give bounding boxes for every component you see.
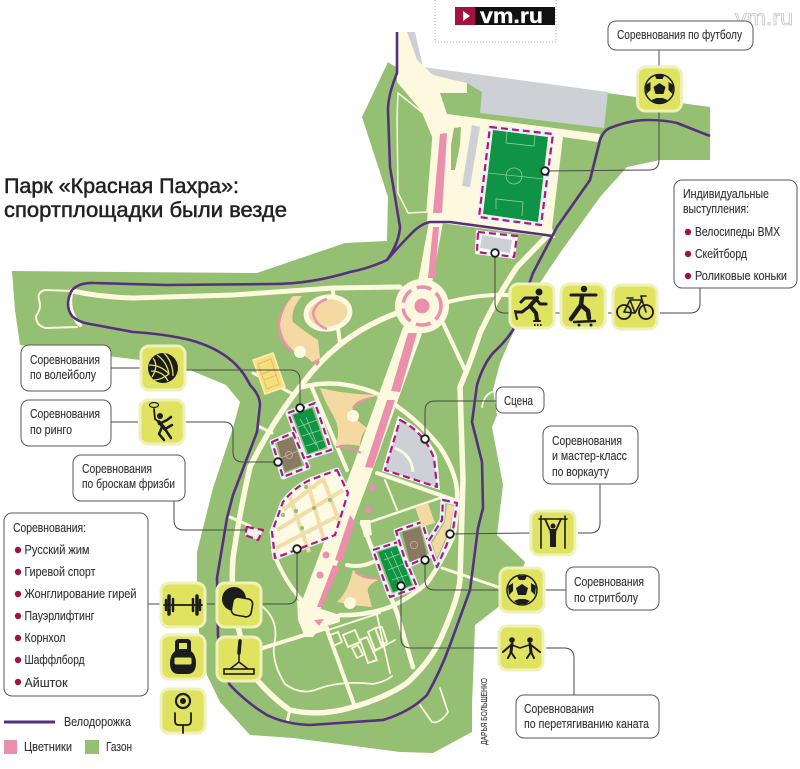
icon: kettlebell	[161, 635, 205, 679]
brown court	[272, 433, 308, 477]
callout lines	[111, 50, 700, 695]
peach bed centre	[320, 388, 383, 446]
football field	[479, 127, 553, 225]
title: Парк «Красная Пахра»:	[4, 175, 239, 198]
icon: cornhole	[217, 583, 261, 627]
icon: bicycle	[613, 285, 657, 329]
icon: roller skater	[510, 284, 554, 328]
callout: frisbee	[73, 455, 185, 501]
grey strip in plaza	[462, 125, 480, 187]
watermark: vm.ru	[735, 7, 793, 30]
panel: competitions list	[4, 513, 148, 696]
callout: tug of war: Соревнования	[524, 701, 594, 716]
title	[4, 175, 287, 222]
location markers	[274, 167, 549, 590]
icon: football	[638, 67, 682, 111]
south brown court	[396, 522, 432, 566]
callout: ringo	[21, 400, 111, 446]
callout: stage	[496, 387, 544, 413]
callout: individual performances: выступления:	[683, 201, 749, 216]
callout: individual performances: Велосипеды ВМХ	[695, 224, 780, 239]
road junction	[360, 520, 372, 537]
peach bed north	[280, 296, 320, 362]
callout: football: Соревнования по футболу	[617, 27, 742, 42]
callout: streetball: по стритболу	[574, 590, 638, 605]
yellow court	[253, 353, 285, 394]
skate ground	[475, 230, 518, 259]
callout: volleyball: Соревнования	[30, 352, 100, 367]
north plaza	[397, 32, 600, 238]
callout: football	[608, 21, 753, 50]
legend: Цветники	[24, 739, 72, 754]
callout: tug of war: по перетягиванию каната	[524, 716, 650, 731]
callout: volleyball	[21, 345, 111, 391]
callout: workout: и мастер-класс	[552, 448, 627, 463]
callout: frisbee: Соревнования	[82, 461, 152, 476]
peach lot	[415, 503, 435, 527]
callout: ringo: по ринго	[30, 422, 72, 437]
callout: volleyball: по волейболу	[30, 367, 96, 382]
icon: streetball	[500, 568, 544, 612]
logo vm.ru	[455, 5, 555, 28]
author credit: ДАРЬЯ БОЛЬШЕНКО	[479, 678, 489, 745]
panel: competitions list: Корнхол	[24, 630, 66, 645]
garden discs	[294, 346, 359, 609]
south plaza	[297, 600, 340, 637]
legend: Газон	[106, 739, 132, 754]
callout: workout	[543, 426, 638, 484]
bike path	[68, 32, 710, 725]
central roundabout	[395, 279, 449, 333]
icon: volleyball	[141, 346, 185, 390]
icon: workout	[531, 511, 575, 555]
icon: shuffleboard	[217, 637, 261, 681]
icon: ringo	[140, 400, 184, 444]
icon: skateboarder	[561, 284, 605, 328]
icon: tug of war	[499, 626, 543, 670]
green strip in plaza	[451, 127, 461, 170]
flower beds	[278, 133, 447, 626]
frisbee ground	[272, 470, 348, 558]
callout: streetball	[566, 567, 659, 610]
panel: competitions list: Русский жим	[24, 542, 90, 557]
callout: tug of war	[516, 695, 659, 738]
callout: streetball: Соревнования	[574, 574, 644, 589]
legend: Велодорожка	[64, 714, 132, 729]
title: спортплощадки были везде	[4, 199, 287, 222]
callout: frisbee: по броскам фризби	[82, 476, 175, 491]
roads	[36, 222, 550, 722]
pink arcs	[336, 398, 378, 578]
logo vm.ru: vm.ru	[480, 5, 543, 28]
logo placeholder frame	[435, 0, 556, 42]
icon: ice stock	[161, 689, 205, 733]
panel: competitions list: Пауэрлифтинг	[24, 608, 95, 623]
stage	[382, 416, 440, 490]
panel: competitions list: Шаффлборд	[24, 652, 85, 667]
callout: individual performances: Индивидуальные	[683, 186, 769, 201]
panel: competitions list: Соревнования:	[13, 520, 86, 535]
lawn area	[12, 62, 710, 753]
volleyball court	[288, 403, 331, 458]
frisbee mini ground	[245, 527, 263, 540]
workout ground	[428, 500, 457, 567]
callout: individual performances: Скейтборд	[695, 246, 747, 261]
callout: workout: Соревнования	[552, 433, 622, 448]
parking lot	[407, 32, 608, 128]
legend	[4, 714, 132, 754]
callout: ringo: Соревнования	[30, 406, 100, 421]
south tennis court	[373, 542, 417, 597]
peach bed south	[337, 570, 378, 607]
panel: competitions list: Айшток	[24, 675, 68, 690]
panel: competitions list: Гиревой спорт	[24, 564, 96, 579]
callout: stage: Сцена	[504, 393, 534, 408]
ornamental ring bed	[304, 294, 352, 332]
icon: barbell	[161, 583, 205, 627]
panel: competitions list: Жонглирование гирей	[24, 586, 136, 601]
callout: individual performances	[674, 180, 797, 288]
callout: workout: по воркауту	[552, 464, 609, 479]
green patch west of plaza	[397, 93, 433, 213]
